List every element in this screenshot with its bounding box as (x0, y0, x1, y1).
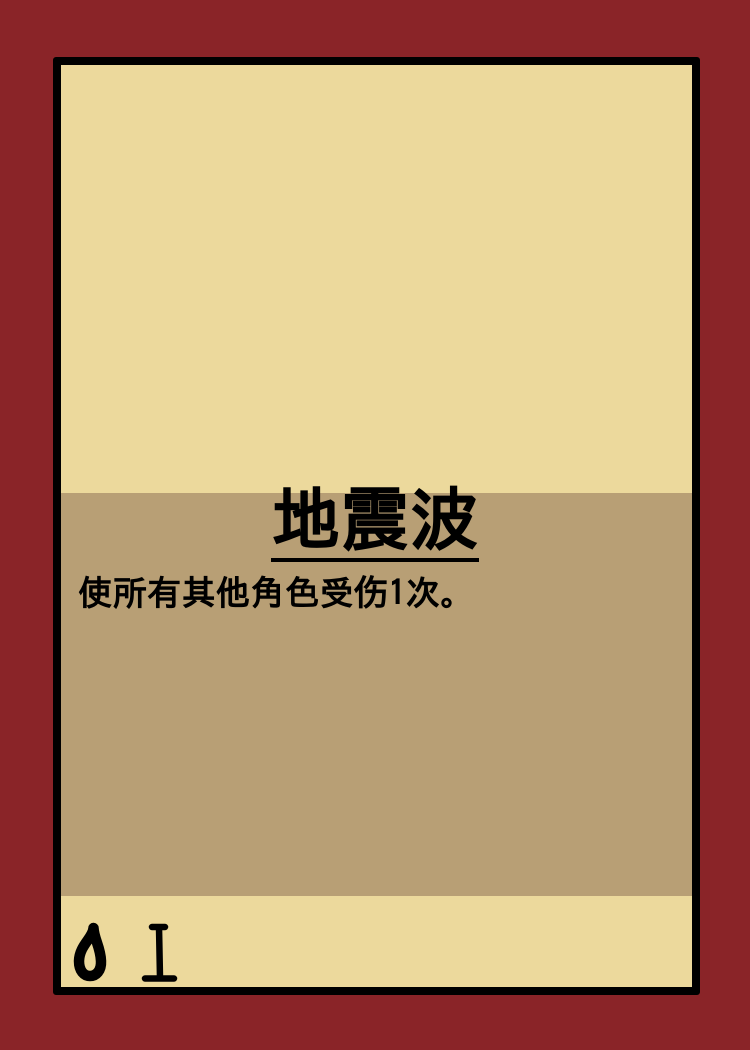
card frame (53, 57, 700, 995)
title: 地震波 (272, 484, 478, 553)
card description text: 使所有其他角色受伤1次。 (78, 576, 475, 610)
icon: drop (79, 928, 101, 976)
icons row (74, 922, 178, 982)
panel: text area (61, 493, 692, 896)
icon: numeral I (145, 927, 174, 978)
